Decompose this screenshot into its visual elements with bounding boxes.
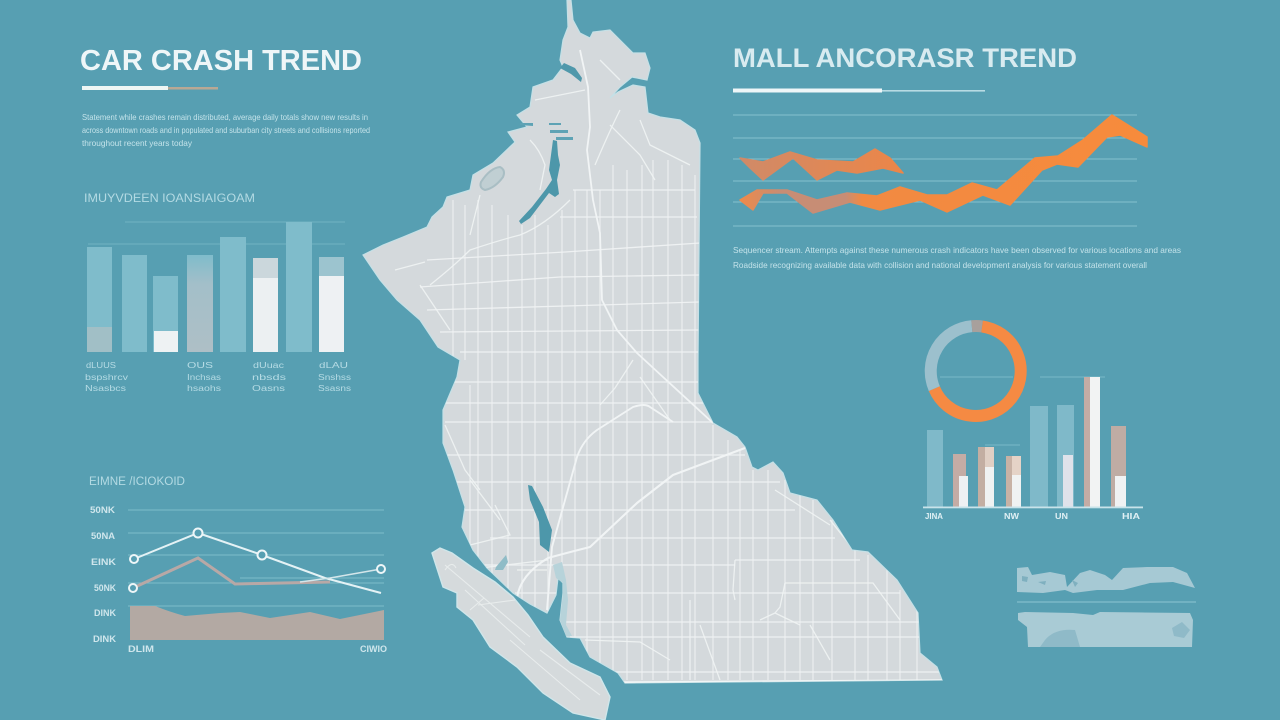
legend block: upper xyxy=(1017,567,1195,593)
map: southern edge highlight xyxy=(622,680,942,682)
map: southwest island xyxy=(432,548,610,720)
area series xyxy=(130,606,384,640)
bar labels: Inchsas xyxy=(187,373,221,382)
bar 8 xyxy=(319,257,344,352)
donut segment: orange xyxy=(934,326,1021,416)
map: southern lake xyxy=(528,485,552,552)
map: oval park outline xyxy=(480,167,504,190)
orange band: upper series xyxy=(740,149,903,180)
intro paragraph xyxy=(82,112,370,148)
donut segment: pale blue xyxy=(931,326,972,389)
group 5 xyxy=(1030,406,1048,507)
map: street grid xyxy=(395,50,942,682)
right paragraph xyxy=(733,245,1181,270)
bar labels: dUuac xyxy=(253,361,284,370)
bar labels: dLAU xyxy=(319,361,348,370)
right heading block xyxy=(733,43,1077,92)
map: small pond xyxy=(495,555,508,570)
group 1 xyxy=(927,430,943,507)
bar labels: Snshss xyxy=(318,373,351,382)
intro paragraph: across downtown roads and in populated and suburban city streets and collisions reported xyxy=(82,125,370,135)
bar 1 xyxy=(87,247,112,352)
intro paragraph: throughout recent years today xyxy=(82,138,193,148)
y axis labels: EINK xyxy=(91,557,117,567)
group 3 xyxy=(978,447,994,507)
y axis labels: DINK xyxy=(93,634,117,644)
group 7 xyxy=(1084,377,1100,507)
markers xyxy=(129,528,385,592)
axis labels: JINA xyxy=(925,511,943,521)
axis labels: UN xyxy=(1055,511,1068,521)
left heading block xyxy=(80,45,370,148)
y axis labels xyxy=(90,505,117,644)
bar labels: Ssasns xyxy=(318,384,351,393)
map: central long lake xyxy=(519,140,560,224)
donut chart xyxy=(931,326,1021,416)
group 4 xyxy=(1006,456,1021,507)
group 6 xyxy=(1057,405,1074,507)
white line series xyxy=(134,533,381,593)
x axis labels: DLIM xyxy=(128,644,154,654)
legend blocks: bottom right xyxy=(1017,567,1196,647)
group 2 xyxy=(953,454,968,507)
bar labels: nbsds xyxy=(252,373,286,382)
bar 7 xyxy=(286,222,312,352)
legend block: lower xyxy=(1018,612,1193,647)
y axis labels: 50NK xyxy=(94,583,116,593)
right paragraph: Sequencer stream. Attempts against these numerous crash indicators have been observed for various locations and areas xyxy=(733,245,1181,255)
pink line series xyxy=(133,558,330,588)
title underline xyxy=(733,88,985,92)
x axis labels xyxy=(128,644,387,654)
section heading: line chart: EIMNE /ICIOKOID xyxy=(89,476,185,488)
bar labels xyxy=(85,361,351,393)
y axis labels: 50NA xyxy=(91,531,116,541)
bar labels: OUS xyxy=(187,361,213,370)
map: mainland land mass xyxy=(363,0,942,683)
bar labels: Oasns xyxy=(252,384,285,393)
bar 2 xyxy=(122,255,147,352)
bar 6 xyxy=(253,258,278,352)
axis labels: HIA xyxy=(1122,511,1140,521)
title: car crash trend: CAR CRASH TREND xyxy=(80,45,362,77)
bar 5 xyxy=(220,237,246,352)
bar labels: hsaohs xyxy=(187,384,221,393)
map: northern inlet xyxy=(560,63,582,82)
title: mall ancorasr trend: MALL ANCORASR TREND xyxy=(733,43,1077,73)
map: island roads xyxy=(445,564,600,700)
map: small waterway xyxy=(520,123,573,140)
bar labels: dLUUS xyxy=(86,361,116,370)
axis labels xyxy=(925,511,1140,521)
bar chart: left xyxy=(85,222,351,393)
intro paragraph: Statement while crashes remain distributed, average daily totals show new results in xyxy=(82,112,368,122)
bar labels: Nsasbcs xyxy=(85,384,126,393)
right paragraph: Roadside recognizing available data with collision and national development analysis for various statement overall xyxy=(733,260,1147,270)
bar chart: right xyxy=(923,377,1143,521)
axis line xyxy=(923,506,1143,508)
second white line xyxy=(300,569,381,582)
donut segment: grey xyxy=(972,320,982,332)
axis labels: NW xyxy=(1004,511,1020,521)
orange band: lower series xyxy=(740,115,1147,213)
x axis labels: CIWIO xyxy=(360,644,387,654)
map: bay shallows xyxy=(553,562,572,636)
y axis labels: 50NK xyxy=(90,505,116,515)
bar 3 xyxy=(153,276,178,352)
line chart: left xyxy=(90,505,387,654)
bar 4 xyxy=(187,255,213,352)
map: region with road network xyxy=(363,0,942,720)
group 8 xyxy=(1111,426,1126,507)
section heading: bar chart: IMUYVDEEN IOANSIAIGOAM xyxy=(84,193,255,205)
y axis labels: DINK xyxy=(94,608,116,618)
orange trend chart xyxy=(733,115,1147,226)
title underline xyxy=(82,86,218,90)
bar labels: bspshrcv xyxy=(85,373,128,382)
